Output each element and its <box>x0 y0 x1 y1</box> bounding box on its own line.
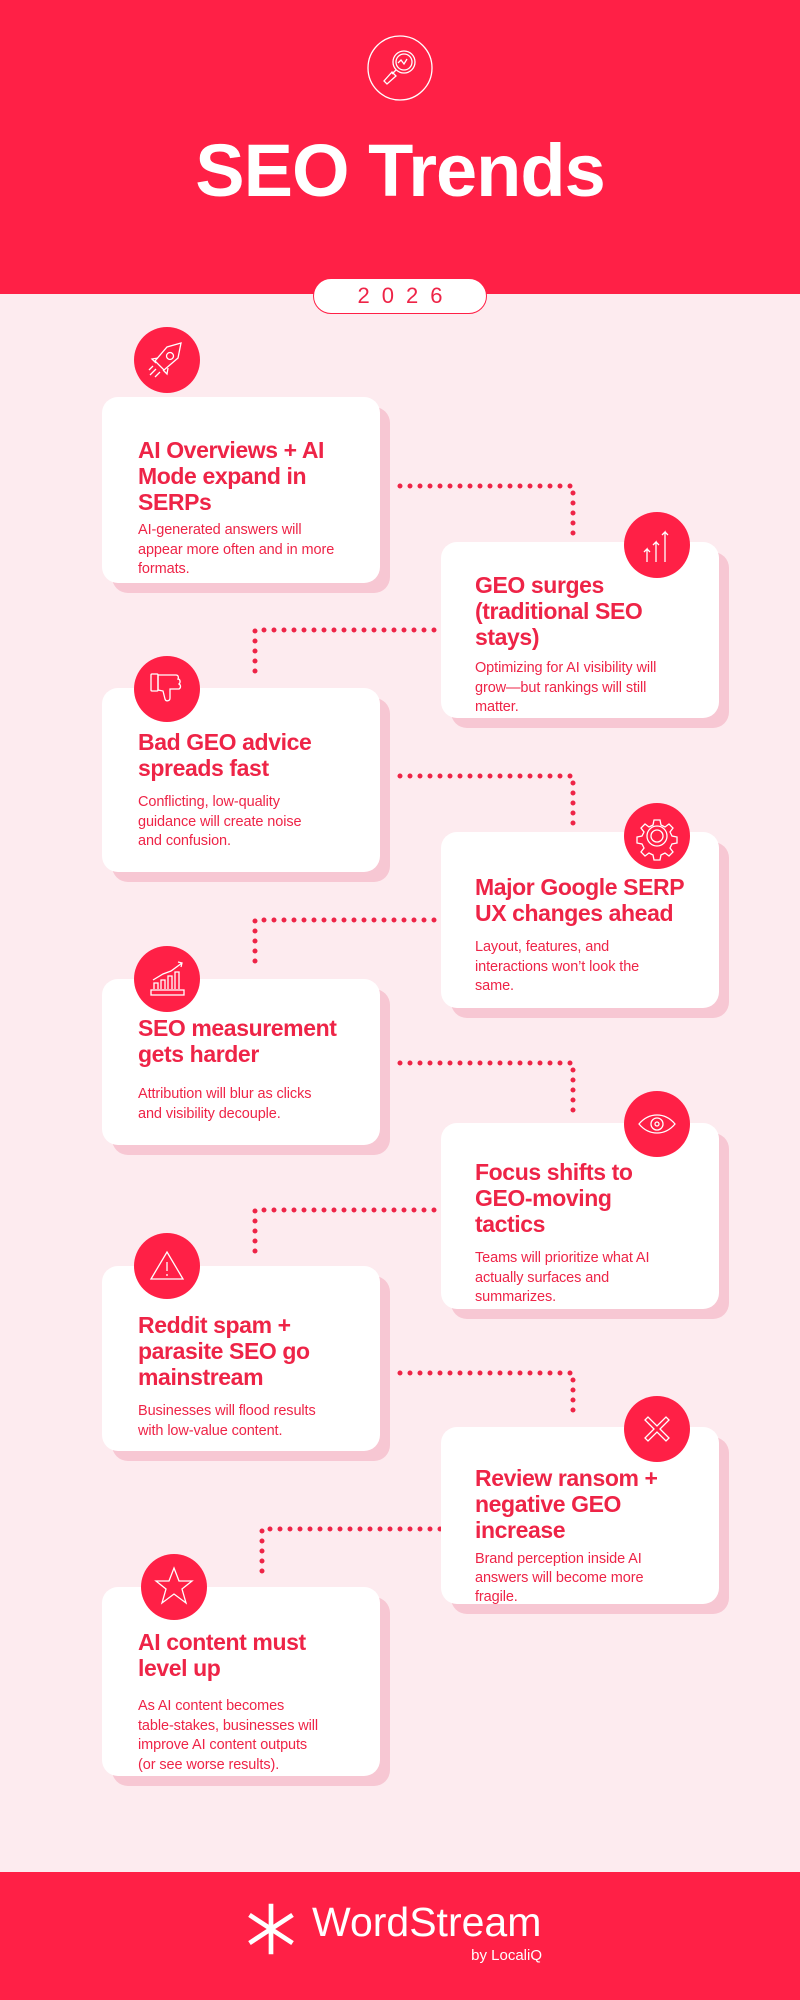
card 1: SERPs <box>138 489 211 515</box>
card 1: AI Overviews + AI <box>138 437 324 463</box>
card 7: with low-value content. <box>138 1422 282 1438</box>
icon: gear <box>624 803 690 869</box>
card 2: grow—but rankings will still <box>475 680 646 696</box>
card 1: AI-generated answers will <box>138 522 302 538</box>
logo: WordStream: WordStream <box>312 1899 541 1945</box>
icon: star <box>141 1554 207 1620</box>
icon: magnifier <box>367 35 433 101</box>
year badge: 2026 <box>358 283 454 308</box>
card 9 <box>102 1587 380 1776</box>
header band <box>0 0 800 294</box>
footer <box>0 1872 800 2000</box>
card 7: Businesses will flood results <box>138 1403 316 1419</box>
card 3: guidance will create noise <box>138 814 301 830</box>
card 9: (or see worse results). <box>138 1756 279 1772</box>
card 2 <box>441 542 719 718</box>
card 5: and visibility decouple. <box>138 1106 281 1122</box>
card 8: fragile. <box>475 1589 518 1605</box>
card 9: AI content must <box>138 1629 306 1655</box>
card 2: matter. <box>475 699 519 715</box>
card 3: and confusion. <box>138 833 231 849</box>
logo: WordStream: by LocaliQ <box>471 1947 542 1964</box>
card 6: actually surfaces and <box>475 1270 609 1286</box>
logo: WordStream <box>248 1899 542 1964</box>
icon: warning <box>134 1233 200 1299</box>
card 8: Review ransom + <box>475 1465 658 1491</box>
card 8: answers will become more <box>475 1570 643 1586</box>
card 4: Layout, features, and <box>475 939 609 955</box>
card 4 <box>441 832 719 1008</box>
card 2: stays) <box>475 624 539 650</box>
icon: thumbs down <box>134 656 200 722</box>
year badge <box>313 278 487 314</box>
title: SEO Trends <box>195 129 605 212</box>
card 4: interactions won’t look the <box>475 958 639 974</box>
icon: rocket <box>134 327 200 393</box>
card 9: level up <box>138 1655 220 1681</box>
icon: bar chart <box>134 946 200 1012</box>
card 4: Major Google SERP <box>475 874 684 900</box>
card 5 <box>102 979 380 1145</box>
card 6 <box>441 1123 719 1309</box>
card 4: same. <box>475 978 514 994</box>
card 7: mainstream <box>138 1364 263 1390</box>
card 5: SEO measurement <box>138 1015 337 1041</box>
card 7: Reddit spam + <box>138 1312 291 1338</box>
card 5: Attribution will blur as clicks <box>138 1086 311 1102</box>
card 9: As AI content becomes <box>138 1698 284 1714</box>
card 3: Conflicting, low-quality <box>138 794 280 810</box>
card 2: GEO surges <box>475 572 604 598</box>
card 6: summarizes. <box>475 1289 556 1305</box>
icon: eye <box>624 1091 690 1157</box>
card 1: appear more often and in more <box>138 542 334 558</box>
card 6: GEO-moving <box>475 1185 612 1211</box>
card 1 <box>102 397 380 583</box>
icon: logo mark <box>248 1904 294 1954</box>
card 6: Teams will prioritize what AI <box>475 1250 649 1266</box>
card 8: increase <box>475 1517 565 1543</box>
card 7 <box>102 1266 380 1451</box>
card 3: Bad GEO advice <box>138 729 311 755</box>
card 9: table-stakes, businesses will <box>138 1718 318 1734</box>
card 8 <box>441 1427 719 1604</box>
card 1: Mode expand in <box>138 463 306 489</box>
card 8: negative GEO <box>475 1491 621 1517</box>
card 2: Optimizing for AI visibility will <box>475 660 656 676</box>
card 7: parasite SEO go <box>138 1338 310 1364</box>
card 4: UX changes ahead <box>475 900 673 926</box>
card 8: Brand perception inside AI <box>475 1551 642 1567</box>
card 6: Focus shifts to <box>475 1159 633 1185</box>
icon: x mark <box>624 1396 690 1462</box>
icon: growth arrows <box>624 512 690 578</box>
card 5: gets harder <box>138 1041 259 1067</box>
card 6: tactics <box>475 1211 545 1237</box>
card 9: improve AI content outputs <box>138 1737 307 1753</box>
card 2: (traditional SEO <box>475 598 642 624</box>
card 3 <box>102 688 380 872</box>
card 1: formats. <box>138 561 190 577</box>
card 3: spreads fast <box>138 755 269 781</box>
